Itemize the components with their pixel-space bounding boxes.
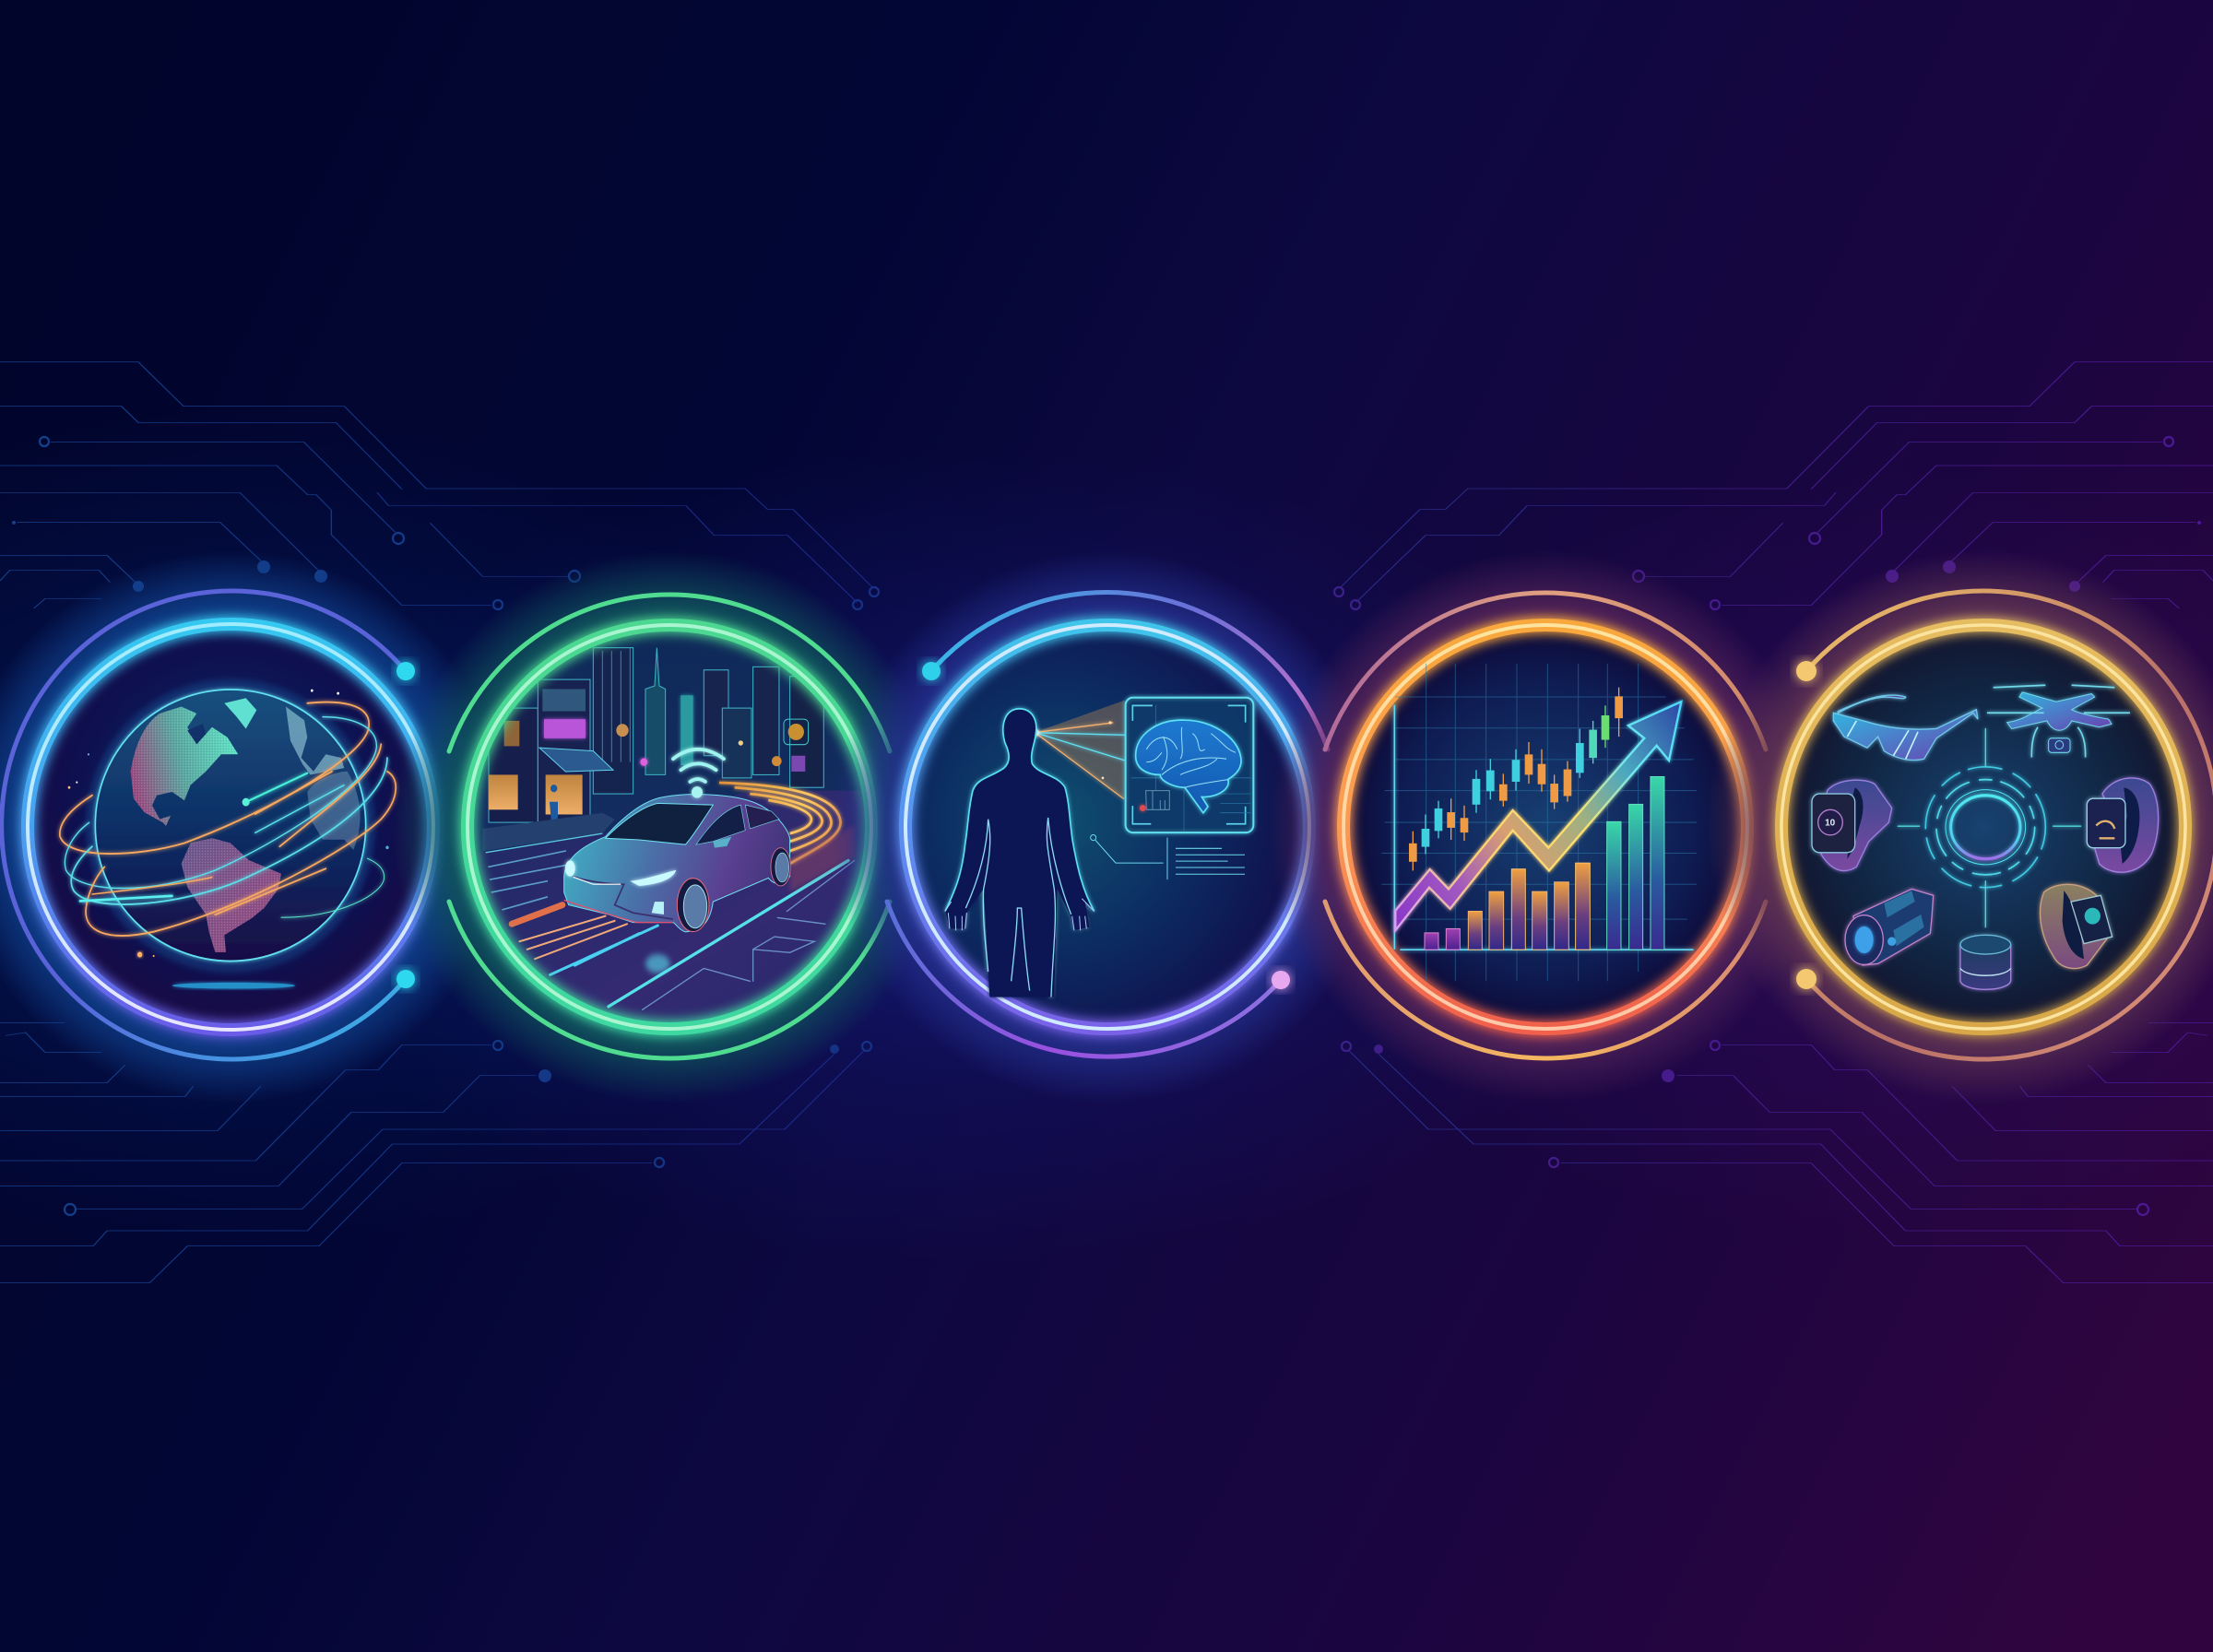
inner neon ring: [1781, 625, 2185, 1029]
chart axes: [1394, 705, 1694, 950]
circuit traces: right side: [1334, 362, 2213, 1283]
icon: drone: [1987, 685, 2130, 757]
callout lines: [1091, 835, 1245, 879]
illustration: city street scene with car: [474, 631, 863, 1022]
human silhouette: [945, 709, 1095, 997]
candlesticks: [1410, 688, 1622, 870]
inner disc: [1343, 625, 1747, 1029]
inner disc: [905, 625, 1309, 1029]
illustration: devices around central hub: [1812, 685, 2159, 989]
rising arrow: [1395, 702, 1681, 930]
wifi signal: [673, 749, 724, 782]
road: [473, 791, 873, 1032]
panel: smart devices hub: [1707, 550, 2213, 1103]
inner neon ring: [28, 624, 433, 1030]
outer arcs with end dots: [887, 592, 1328, 1056]
circuit traces: left side: [0, 362, 879, 1283]
icon: globe with orbit streaks: [60, 679, 396, 988]
icon: smart watch lower right: [2041, 884, 2112, 968]
panel: human body with brain scan: [831, 550, 1384, 1103]
icon: wearable camera: [1845, 889, 1934, 965]
outer arc with end dots: [2, 591, 415, 1059]
outer arc with end dots: [1796, 591, 2213, 1059]
inner neon ring: [905, 625, 1309, 1029]
central hub: [1898, 728, 2081, 927]
panel: global connectivity globe: [0, 550, 507, 1103]
icon: smart puck: [1960, 935, 2011, 989]
outer arcs: [1325, 593, 1766, 1058]
scan beams: [1031, 700, 1125, 800]
icon: smart glasses: [1833, 695, 1978, 761]
inner disc: [28, 624, 433, 1030]
icon: smart watch left: [1812, 780, 1892, 870]
inner neon ring: [467, 625, 871, 1029]
volume bars: [1425, 776, 1664, 950]
inner disc: [1781, 625, 2185, 1029]
icon: smart watch left: 10: [1825, 818, 1836, 829]
left road markings: [489, 851, 855, 1009]
light trails: [719, 783, 841, 864]
chart: candles, bars and rising arrow: [1381, 664, 1697, 981]
pedestrian: [550, 785, 558, 820]
outer arcs: [449, 595, 890, 1058]
icon: smart watch right: [2087, 778, 2159, 872]
car body: [564, 795, 790, 932]
illustration: silhouette, beams and brain panel: [945, 698, 1253, 997]
skyline buildings: [489, 648, 823, 826]
inner neon ring: [1343, 625, 1747, 1029]
panel: autonomous vehicle: [400, 558, 900, 1095]
panel: market growth chart: [1269, 550, 1822, 1103]
orbit streaks: [60, 702, 396, 936]
icon: brain: [1136, 720, 1241, 813]
scan panel: [1126, 698, 1253, 832]
